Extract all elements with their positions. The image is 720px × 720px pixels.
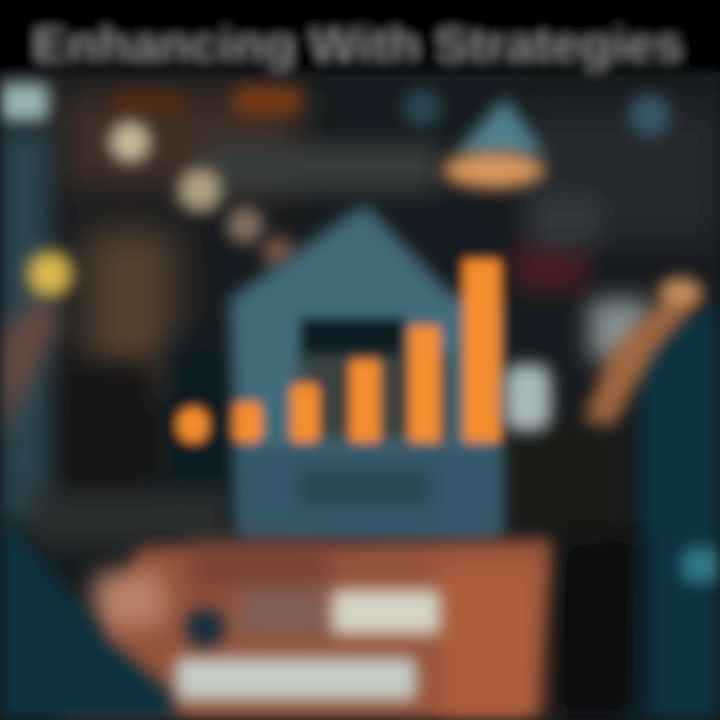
top lights strip (0, 84, 670, 135)
house graphic (230, 205, 500, 535)
floating coin lights (28, 122, 293, 296)
icon: desk lamp (444, 98, 545, 187)
background: blurred interior (0, 90, 720, 545)
table (60, 540, 552, 720)
bar chart (178, 260, 500, 442)
person at lower left (0, 515, 180, 720)
papers on table (176, 590, 440, 700)
title: Enhancing With Strategies (33, 18, 683, 71)
title band (0, 0, 720, 72)
person at right (550, 280, 720, 720)
right side panel glow (505, 300, 650, 430)
title backdrop (0, 0, 720, 72)
